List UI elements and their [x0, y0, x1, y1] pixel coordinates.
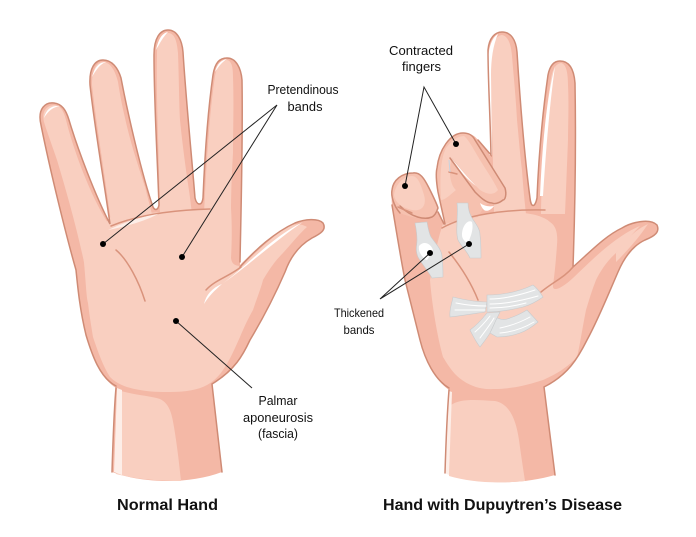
- middle and index finger light: [491, 35, 526, 214]
- callout: pretendinous bands: Pretendinous: [268, 83, 338, 97]
- gaps between bent fingers and palm: [480, 203, 494, 211]
- palm creases: [442, 210, 545, 228]
- callout: pretendinous bands: [100, 83, 338, 260]
- callout: palmar aponeurosis: [173, 318, 313, 441]
- palm creases: [111, 209, 210, 226]
- wrist light area: [449, 400, 525, 482]
- wrist highlight: [116, 391, 181, 481]
- heading: normal hand: Normal Hand: [117, 497, 218, 514]
- contracted ring finger: [436, 133, 506, 224]
- finger tip highlights: [44, 106, 60, 118]
- right hand outline: [392, 32, 658, 475]
- illustration: normal hand: [40, 30, 324, 481]
- thumb tip light: [616, 224, 648, 262]
- callout: palmar aponeurosis: Palmar: [258, 394, 298, 408]
- thickened band: ring finger: [457, 203, 481, 258]
- callout: palmar aponeurosis: aponeurosis: [243, 411, 313, 425]
- contracted little finger: [392, 173, 438, 218]
- palm light area: [430, 213, 640, 389]
- palm and thumb light area: [83, 208, 307, 392]
- hand outline: [40, 30, 324, 472]
- thickened bands: palm cord: [450, 285, 543, 347]
- heading: hand with Dupuytren's disease: Hand with Dupuytren’s Disease: [383, 497, 622, 514]
- callout: contracted fingers: [389, 44, 459, 189]
- thickened band: little finger: [415, 222, 443, 278]
- callout: thickened bands: bands: [344, 323, 374, 337]
- illustration: hand with Dupuytren's disease: [392, 32, 658, 482]
- callout: thickened bands: Thickened: [334, 306, 384, 320]
- callout: thickened bands: [334, 241, 472, 337]
- callout: contracted fingers: Contracted: [389, 44, 453, 58]
- callout: palmar aponeurosis: (fascia): [258, 427, 298, 441]
- callout: pretendinous bands: bands: [288, 100, 322, 114]
- callout: contracted fingers: fingers: [402, 60, 441, 74]
- finger light areas: [43, 105, 112, 262]
